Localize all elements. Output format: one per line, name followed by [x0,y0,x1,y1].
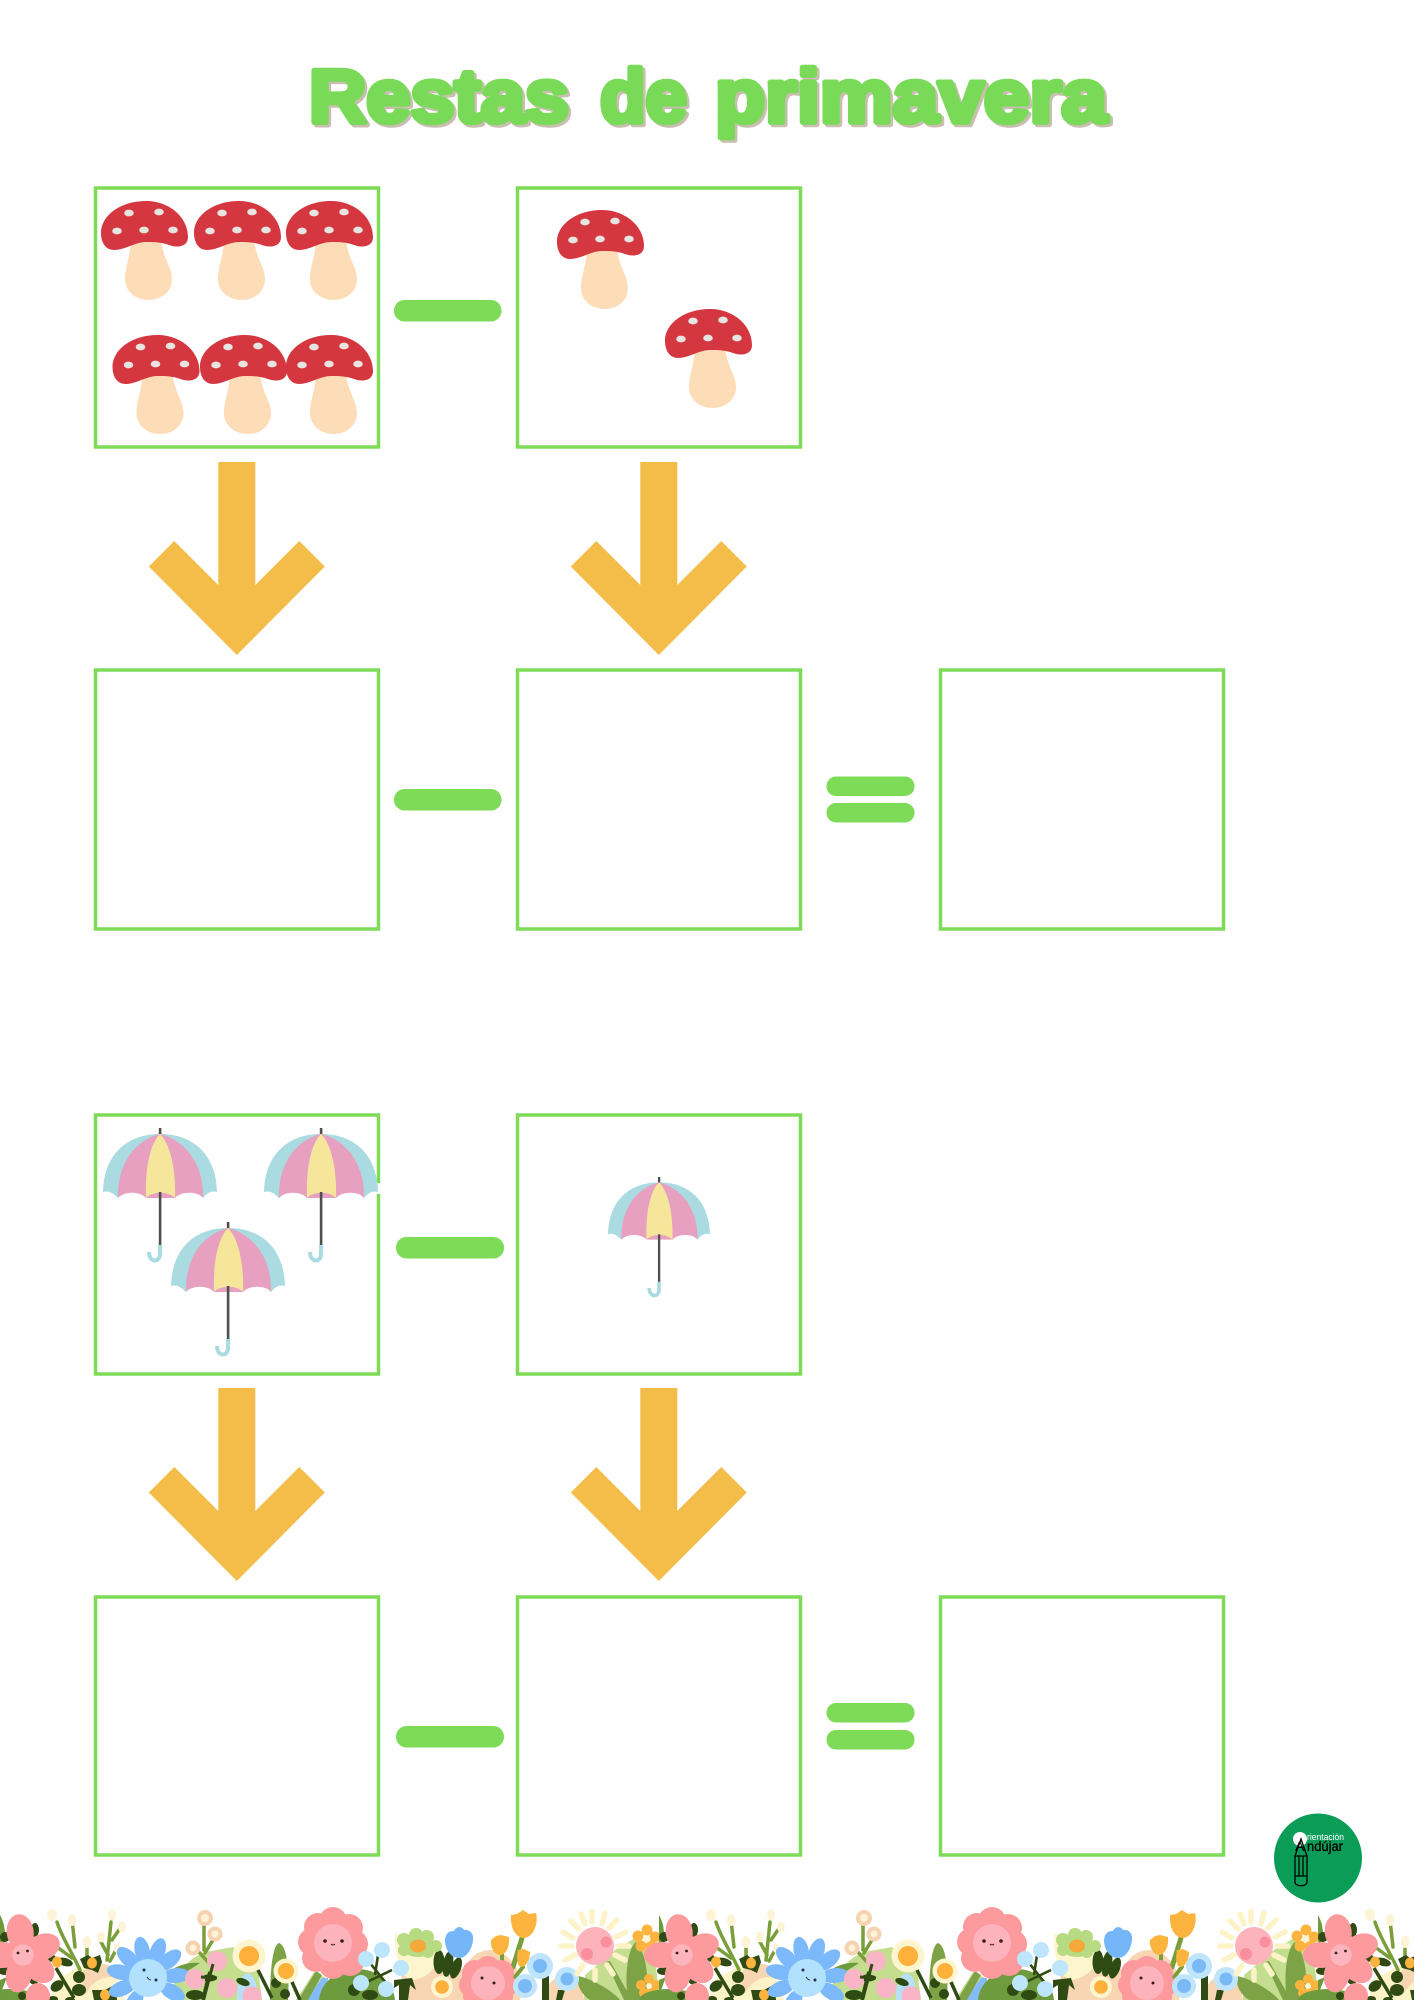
flower tile: repeat end [1298,1907,1414,2000]
flower: pink five petals [0,1913,64,1995]
arrow: down left [149,1388,325,1581]
logo: Orientación Andújar: A [1295,1838,1305,1854]
box: one umbrella [518,1115,800,1374]
flower: small orange [632,1924,661,1998]
logo: Orientación Andújar [1274,1814,1362,1902]
flower: yellow daisies [232,1940,453,1998]
title: de [600,54,687,138]
minus sign [394,789,502,810]
dark stems: pink flowers [201,1964,217,1998]
arrow: down right [571,1388,747,1581]
arrow: down left [149,462,325,655]
equals sign [826,776,914,822]
answer box: subtrahend [518,670,800,929]
title: de [602,56,690,140]
flower tile: repeat [639,1907,1323,2000]
flower border [0,1907,1414,2000]
answer box: result [940,670,1224,929]
flower: small pink [185,1951,262,2000]
flower: lime scalloped [397,1928,442,1958]
flower: blue daisy [105,1935,190,2000]
title: Restas [312,56,572,140]
minus sign [396,1726,504,1748]
dark green clover leaves [0,1923,664,2000]
box: two mushrooms [518,188,800,447]
answer box: minuend [96,1597,378,1855]
flower: light blue forget-me-nots [353,1942,409,1997]
answer box: result [940,1597,1224,1855]
clover orange centers [52,1956,110,2000]
flower: big pink [298,1907,368,1979]
minus sign [396,1237,504,1258]
title [309,54,1111,140]
logo: Orientación Andújar: rientación [1307,1832,1344,1843]
title: Restas [309,54,569,138]
equals sign [826,1703,914,1750]
green stems [57,1920,523,1977]
background shapes [0,1915,664,2000]
cream buds [47,1909,126,1953]
small peach flowers [186,1910,222,1956]
answer box: subtrahend [518,1597,800,1855]
panel: umbrella subtraction [96,1115,1224,1855]
flower: pink lower [459,1956,517,2000]
lower pink petal [26,1983,50,2000]
title: primavera [715,54,1108,138]
logo: Orientación Andújar: ndújar [1307,1839,1343,1854]
flower: blue tulip [445,1927,473,1958]
answer box: minuend [96,670,378,929]
flower: blue round flowers [513,1953,579,1998]
flower tile [0,1907,664,2000]
box: three umbrellas [96,1115,381,1374]
title: primavera [718,56,1111,140]
arrow: down right [571,462,747,655]
flower: orange tulips [491,1910,537,1967]
minus sign [394,300,502,322]
icon: pencil [1295,1839,1307,1886]
box: six mushrooms [96,188,378,447]
panel: mushroom subtraction [96,188,1224,929]
flower: sun with rays [561,1911,629,1980]
